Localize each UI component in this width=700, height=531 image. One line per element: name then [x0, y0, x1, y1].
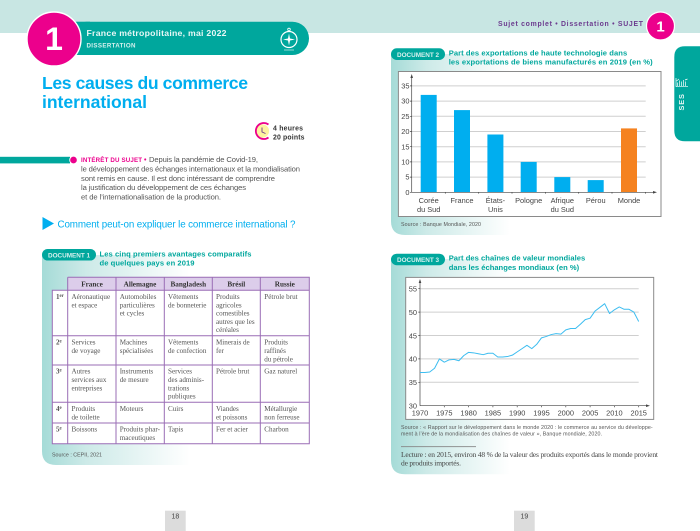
table header [81, 280, 295, 288]
right header text: Sujet complet • Dissertation • SUJET [498, 21, 644, 28]
table rows [56, 293, 300, 442]
banner type text: DISSERTATION [86, 42, 136, 50]
top band [0, 0, 700, 33]
table rows: particulières [120, 301, 155, 309]
document 3 heading: dans les échanges mondiaux (en %) [449, 263, 580, 272]
x axis labels [412, 408, 647, 418]
table rows: Métallurgie [264, 405, 297, 413]
y axis labels: 30 [409, 402, 417, 410]
banner exam text: France métropolitaine, mai 2022 [86, 28, 227, 38]
question: Comment peut-on expliquer le commerce international ? [58, 220, 296, 230]
table rows: Instruments [120, 368, 153, 376]
table rows: Pétrole brut [264, 293, 298, 301]
x axis labels: Pérou [586, 196, 606, 205]
table rows: Fer et acier [216, 426, 249, 434]
table header: Bangladesh [171, 280, 206, 288]
interest bar [0, 156, 77, 164]
table rows: de confection [168, 347, 207, 355]
x axis labels: 2005 [582, 408, 598, 418]
duration and points: 20 points [273, 134, 305, 142]
table rows: spécialisées [120, 347, 153, 355]
table header: Allemagne [124, 280, 156, 288]
table rows: Moteurs [120, 405, 144, 413]
x axis labels: 1985 [485, 408, 501, 418]
x axis labels: France [450, 196, 474, 205]
interest text: le développement des échanges internationaux et la mondialisation [81, 164, 300, 174]
table rows: non ferreuse [264, 413, 300, 421]
table rows: des adminis- [168, 376, 205, 384]
y axis labels: 40 [409, 355, 417, 364]
table rows: raffinés [264, 347, 286, 355]
x axis labels: 1980 [460, 408, 477, 418]
x axis labels: Monde [618, 196, 640, 205]
document 2 source: Source : Banque Mondiale, 2020 [401, 222, 481, 228]
x axis labels: du Sud [417, 205, 440, 214]
table header: France [81, 280, 103, 288]
chart axes [418, 279, 650, 407]
y axis labels [401, 82, 410, 197]
table rows: Machines [120, 339, 148, 347]
document 1 heading: de quelques pays en 2019 [100, 259, 194, 268]
table rows: Autres [72, 368, 91, 376]
table rows: Produits [264, 339, 288, 347]
x axis labels: Unis [488, 205, 503, 214]
document 1 heading [100, 250, 252, 268]
table rows: Pétrole brut [216, 368, 249, 376]
icon: bar chart [676, 78, 688, 87]
document 3 heading: Part des chaînes de valeur mondiales [449, 254, 585, 263]
y axis labels: 35 [401, 82, 410, 90]
document 3 source: Source : « Rapport sur le développement dans le monde 2020 : le commerce au service du développe- [401, 425, 653, 431]
table rows: et poissons [216, 413, 248, 421]
table rows: e [60, 427, 62, 432]
table rows: e [60, 406, 62, 411]
interest text: sont remis en cause. Il est donc intéressant de comprendre [81, 174, 275, 183]
title [42, 73, 248, 112]
table rows: de bonneterie [168, 301, 206, 309]
y axis labels: 10 [401, 158, 410, 166]
table rows: er [60, 294, 65, 299]
table rows: comestibles [216, 310, 250, 318]
table rows: maceutiques [120, 434, 155, 442]
table rows: Tapis [168, 426, 184, 434]
table rows: de voyage [72, 347, 100, 355]
y axis labels: 35 [409, 378, 417, 387]
table rows: de mesure [120, 376, 149, 384]
y axis labels: 45 [409, 331, 417, 340]
table rows: de toilette [72, 413, 100, 421]
table rows: Cuirs [168, 405, 184, 413]
document 3 badge: DOCUMENT 3 [397, 257, 439, 264]
x axis labels: États- [486, 196, 506, 205]
table rows: Viandes [216, 405, 239, 413]
table rows: céréales [216, 326, 239, 334]
table rows: Produits phar- [120, 426, 161, 434]
interest text: Depuis la pandémie de Covid-19, [149, 155, 258, 164]
x axis labels: 1995 [533, 408, 550, 418]
document 3 source [401, 425, 653, 438]
x axis labels: 1975 [436, 408, 453, 418]
y axis labels: 20 [401, 127, 410, 136]
x axis labels: Corée [419, 196, 439, 205]
table header: Brésil [227, 280, 245, 288]
icon: clock [256, 123, 269, 139]
table rows: du pétrole [264, 355, 293, 363]
chart axes [410, 74, 657, 194]
table rows: agricoles [216, 301, 242, 309]
y axis labels [409, 284, 417, 410]
number circle: 1 [45, 21, 63, 57]
table rows: Vêtements [168, 293, 199, 301]
y axis labels: 30 [401, 97, 410, 106]
document 1 heading: Les cinq premiers avantages comparatifs [100, 250, 252, 258]
y axis labels: 5 [405, 173, 410, 182]
interest text: la justification du développement de ces échanges [81, 183, 246, 192]
left banner [70, 22, 309, 55]
table rows: e [60, 340, 62, 345]
y axis labels: 55 [409, 284, 417, 294]
table rows: Services [168, 368, 192, 376]
blue bars [421, 95, 604, 192]
interest text: INTÉRÊT DU SUJET [81, 156, 142, 164]
x axis labels: 1970 [412, 408, 428, 418]
table rows: et espace [72, 301, 97, 309]
x axis labels: du Sud [551, 205, 574, 214]
table rows: Charbon [264, 426, 289, 434]
page number 19 [514, 511, 535, 531]
x axis labels: 2010 [606, 408, 623, 418]
table rows: Produits [72, 405, 95, 413]
document 3 heading [449, 254, 585, 272]
x axis labels: Pologne [515, 196, 542, 205]
table rows: e [60, 369, 62, 374]
x axis labels: 1990 [509, 408, 525, 418]
page number 18: 18 [172, 514, 179, 520]
interest text [81, 155, 300, 202]
table [52, 277, 309, 444]
number circle [27, 12, 81, 66]
document 3 badge [391, 254, 445, 265]
page number 19: 19 [521, 514, 528, 520]
table rows: et cycles [120, 310, 145, 318]
panel: document 3 [391, 254, 670, 474]
right number circle [646, 12, 674, 40]
SES label: SES [677, 94, 686, 110]
table rows: 3 [56, 368, 60, 376]
duration and points: 4 heures [273, 126, 303, 132]
interest text: • [144, 157, 147, 164]
x axis labels [417, 196, 640, 214]
table rows: Gaz naturel [264, 368, 297, 376]
reading note [401, 450, 659, 468]
x axis labels: 2015 [630, 408, 647, 418]
y axis labels: 15 [401, 142, 410, 151]
duration and points [273, 126, 305, 142]
orange world bar [621, 128, 637, 192]
document 1 badge [42, 249, 96, 260]
document 2 badge [391, 48, 445, 60]
title: Les causes du commerce [42, 73, 248, 93]
table rows: services aux [72, 376, 107, 384]
table rows: Vêtements [168, 339, 199, 347]
question arrow [42, 217, 54, 230]
table rows: Minerais de [216, 339, 250, 347]
icon: compass [281, 28, 297, 50]
x axis labels: 2000 [558, 408, 574, 418]
table rows: 2 [56, 339, 60, 347]
page number 18 [165, 511, 186, 531]
table rows: fer [216, 347, 225, 355]
table rows: Produits [216, 293, 240, 301]
table rows: Automobiles [120, 293, 157, 301]
panel: document 1 [42, 249, 330, 465]
y axis labels: 50 [409, 308, 417, 317]
y axis labels: 25 [401, 112, 410, 121]
document 1 badge: DOCUMENT 1 [48, 252, 90, 260]
SES side tab [674, 46, 700, 141]
table rows: Services [72, 339, 96, 347]
bar chart [398, 72, 661, 216]
document 2 heading [449, 48, 653, 67]
document 2 heading: les exportations de biens manufacturés en 2019 (en %) [449, 58, 653, 67]
table header: Russie [275, 280, 295, 288]
document 3 source: ment à l’ère de la mondialisation des chaînes de valeur », Banque mondiale, 2020. [401, 432, 602, 438]
table rows: Boissons [72, 426, 97, 434]
data line [420, 304, 639, 372]
table rows: entreprises [72, 384, 102, 392]
table rows: 1 [56, 293, 60, 301]
table rows: 5 [56, 426, 60, 434]
table rows: 4 [56, 405, 60, 413]
line chart [406, 277, 654, 419]
table rows: Aéronautique [72, 293, 110, 301]
document 2 badge: DOCUMENT 2 [397, 52, 439, 59]
table rows: publiques [168, 393, 196, 401]
panel: document 2 [391, 48, 670, 235]
table rows: autres que les [216, 318, 255, 326]
document 1 source: Source : CEPII, 2021 [52, 452, 102, 458]
x axis labels: Afrique [551, 196, 574, 205]
title: international [42, 92, 147, 112]
table rows: trations [168, 384, 190, 392]
document 2 heading: Part des exportations de haute technologie dans [449, 48, 627, 58]
right number circle: 1 [656, 18, 665, 36]
reading note: Lecture : en 2015, environ 48 % de la valeur des produits exportés dans le monde provient [401, 450, 659, 459]
y axis labels: 0 [405, 188, 410, 197]
reading note: de produits importés. [401, 458, 461, 468]
interest text: et de l’internationalisation de la production. [81, 192, 221, 202]
